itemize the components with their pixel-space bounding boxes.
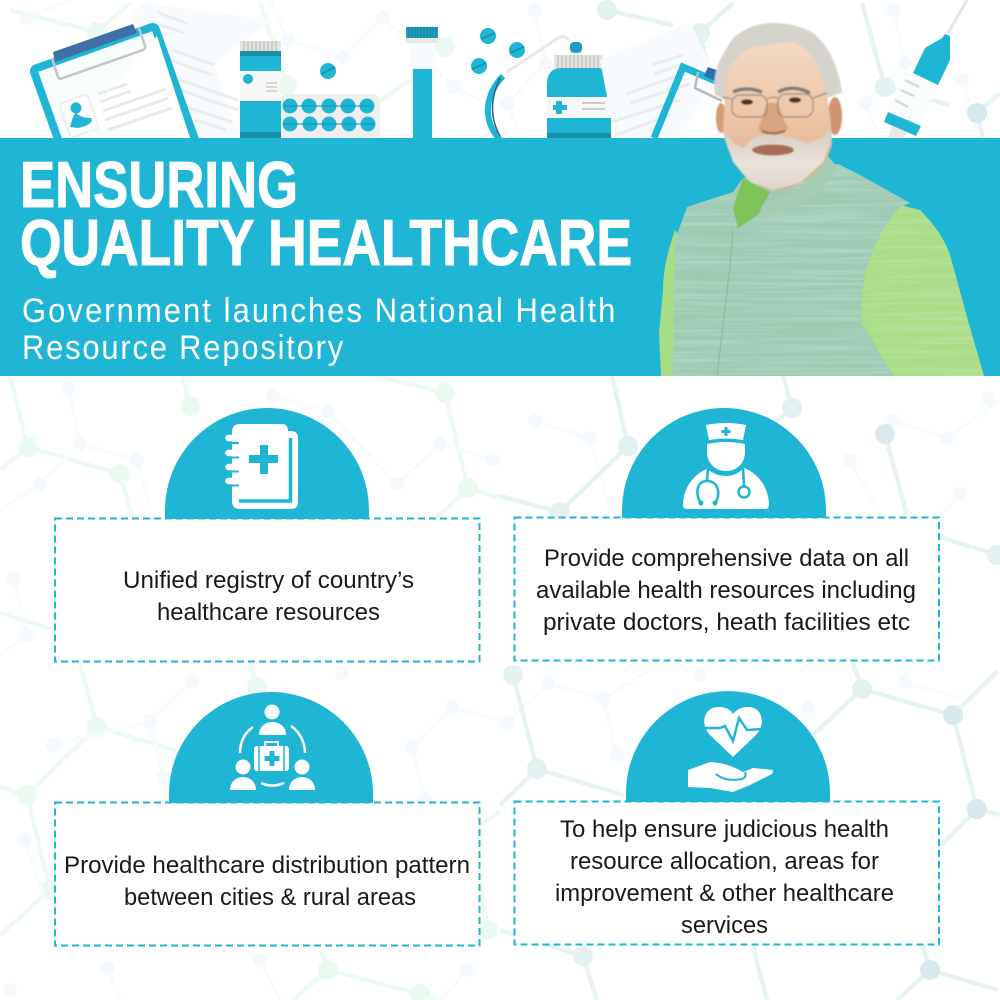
hair <box>714 23 842 100</box>
semicircle badge: allocation <box>626 691 830 802</box>
text: allocation: improvement & other healthcare <box>555 880 894 907</box>
text: distribution: Provide healthcare distribution pattern <box>64 852 470 879</box>
portrait of a man in green jacket <box>659 23 984 376</box>
title: ENSURING <box>20 148 298 221</box>
medicine jar <box>547 55 611 138</box>
text: allocation <box>555 816 894 939</box>
banner background <box>0 138 1000 376</box>
head <box>714 23 842 190</box>
test tube <box>406 27 438 138</box>
text: distribution: between cities & rural areas <box>124 884 416 911</box>
panel: judicious allocation <box>514 802 939 944</box>
shirt collar <box>733 178 770 228</box>
clipboard with patient record <box>28 21 228 265</box>
right sleeve <box>860 205 984 376</box>
loose pill <box>320 63 336 79</box>
eyebrows <box>733 88 810 93</box>
subtitle: Resource Repository <box>22 329 344 366</box>
medicine bottle <box>240 41 281 138</box>
text: data: private doctors, heath facilities etc <box>543 609 910 636</box>
title <box>20 148 632 279</box>
text: distribution <box>64 852 470 911</box>
text: allocation: resource allocation, areas for <box>570 848 879 875</box>
beard <box>723 122 832 190</box>
illustration strip: medical supplies <box>28 0 967 265</box>
glasses <box>723 93 827 117</box>
nose <box>758 103 788 134</box>
text: data: Provide comprehensive data on all <box>544 545 909 572</box>
semicircle badge: doctor <box>622 408 826 518</box>
subtitle: Government launches National Health <box>22 292 615 329</box>
left sleeve <box>659 230 690 376</box>
second document and clipboard <box>600 22 725 138</box>
face <box>723 42 832 190</box>
icon: team around medical kit <box>230 704 315 790</box>
lips <box>752 144 794 156</box>
text: data <box>536 545 916 636</box>
vest <box>673 164 910 376</box>
ears <box>716 103 726 133</box>
icon: doctor with stethoscope <box>683 423 769 509</box>
panel: unified registry <box>55 518 480 662</box>
text: allocation: services <box>681 912 768 939</box>
icon: heart over open hand <box>688 707 773 792</box>
icon: medical notebook <box>228 424 298 509</box>
text: registry: healthcare resources <box>157 599 380 626</box>
semicircle badge: registry <box>165 408 369 519</box>
semicircle badge: distribution <box>169 692 373 803</box>
pills and stethoscope <box>471 28 582 140</box>
text: registry <box>123 567 414 626</box>
title: QUALITY HEALTHCARE <box>20 206 632 279</box>
syringe <box>884 0 967 138</box>
text: data: available health resources including <box>536 577 916 604</box>
text: registry: Unified registry of country’s <box>123 567 414 594</box>
panel: comprehensive data <box>514 518 939 660</box>
text: allocation: To help ensure judicious health <box>560 816 889 843</box>
panel: distribution pattern <box>55 802 480 946</box>
blister pack of pills <box>281 94 380 142</box>
subtitle <box>22 292 615 366</box>
background document left <box>120 3 275 138</box>
vest collar <box>758 155 838 218</box>
eyes <box>741 97 801 105</box>
vest placket <box>717 230 733 376</box>
